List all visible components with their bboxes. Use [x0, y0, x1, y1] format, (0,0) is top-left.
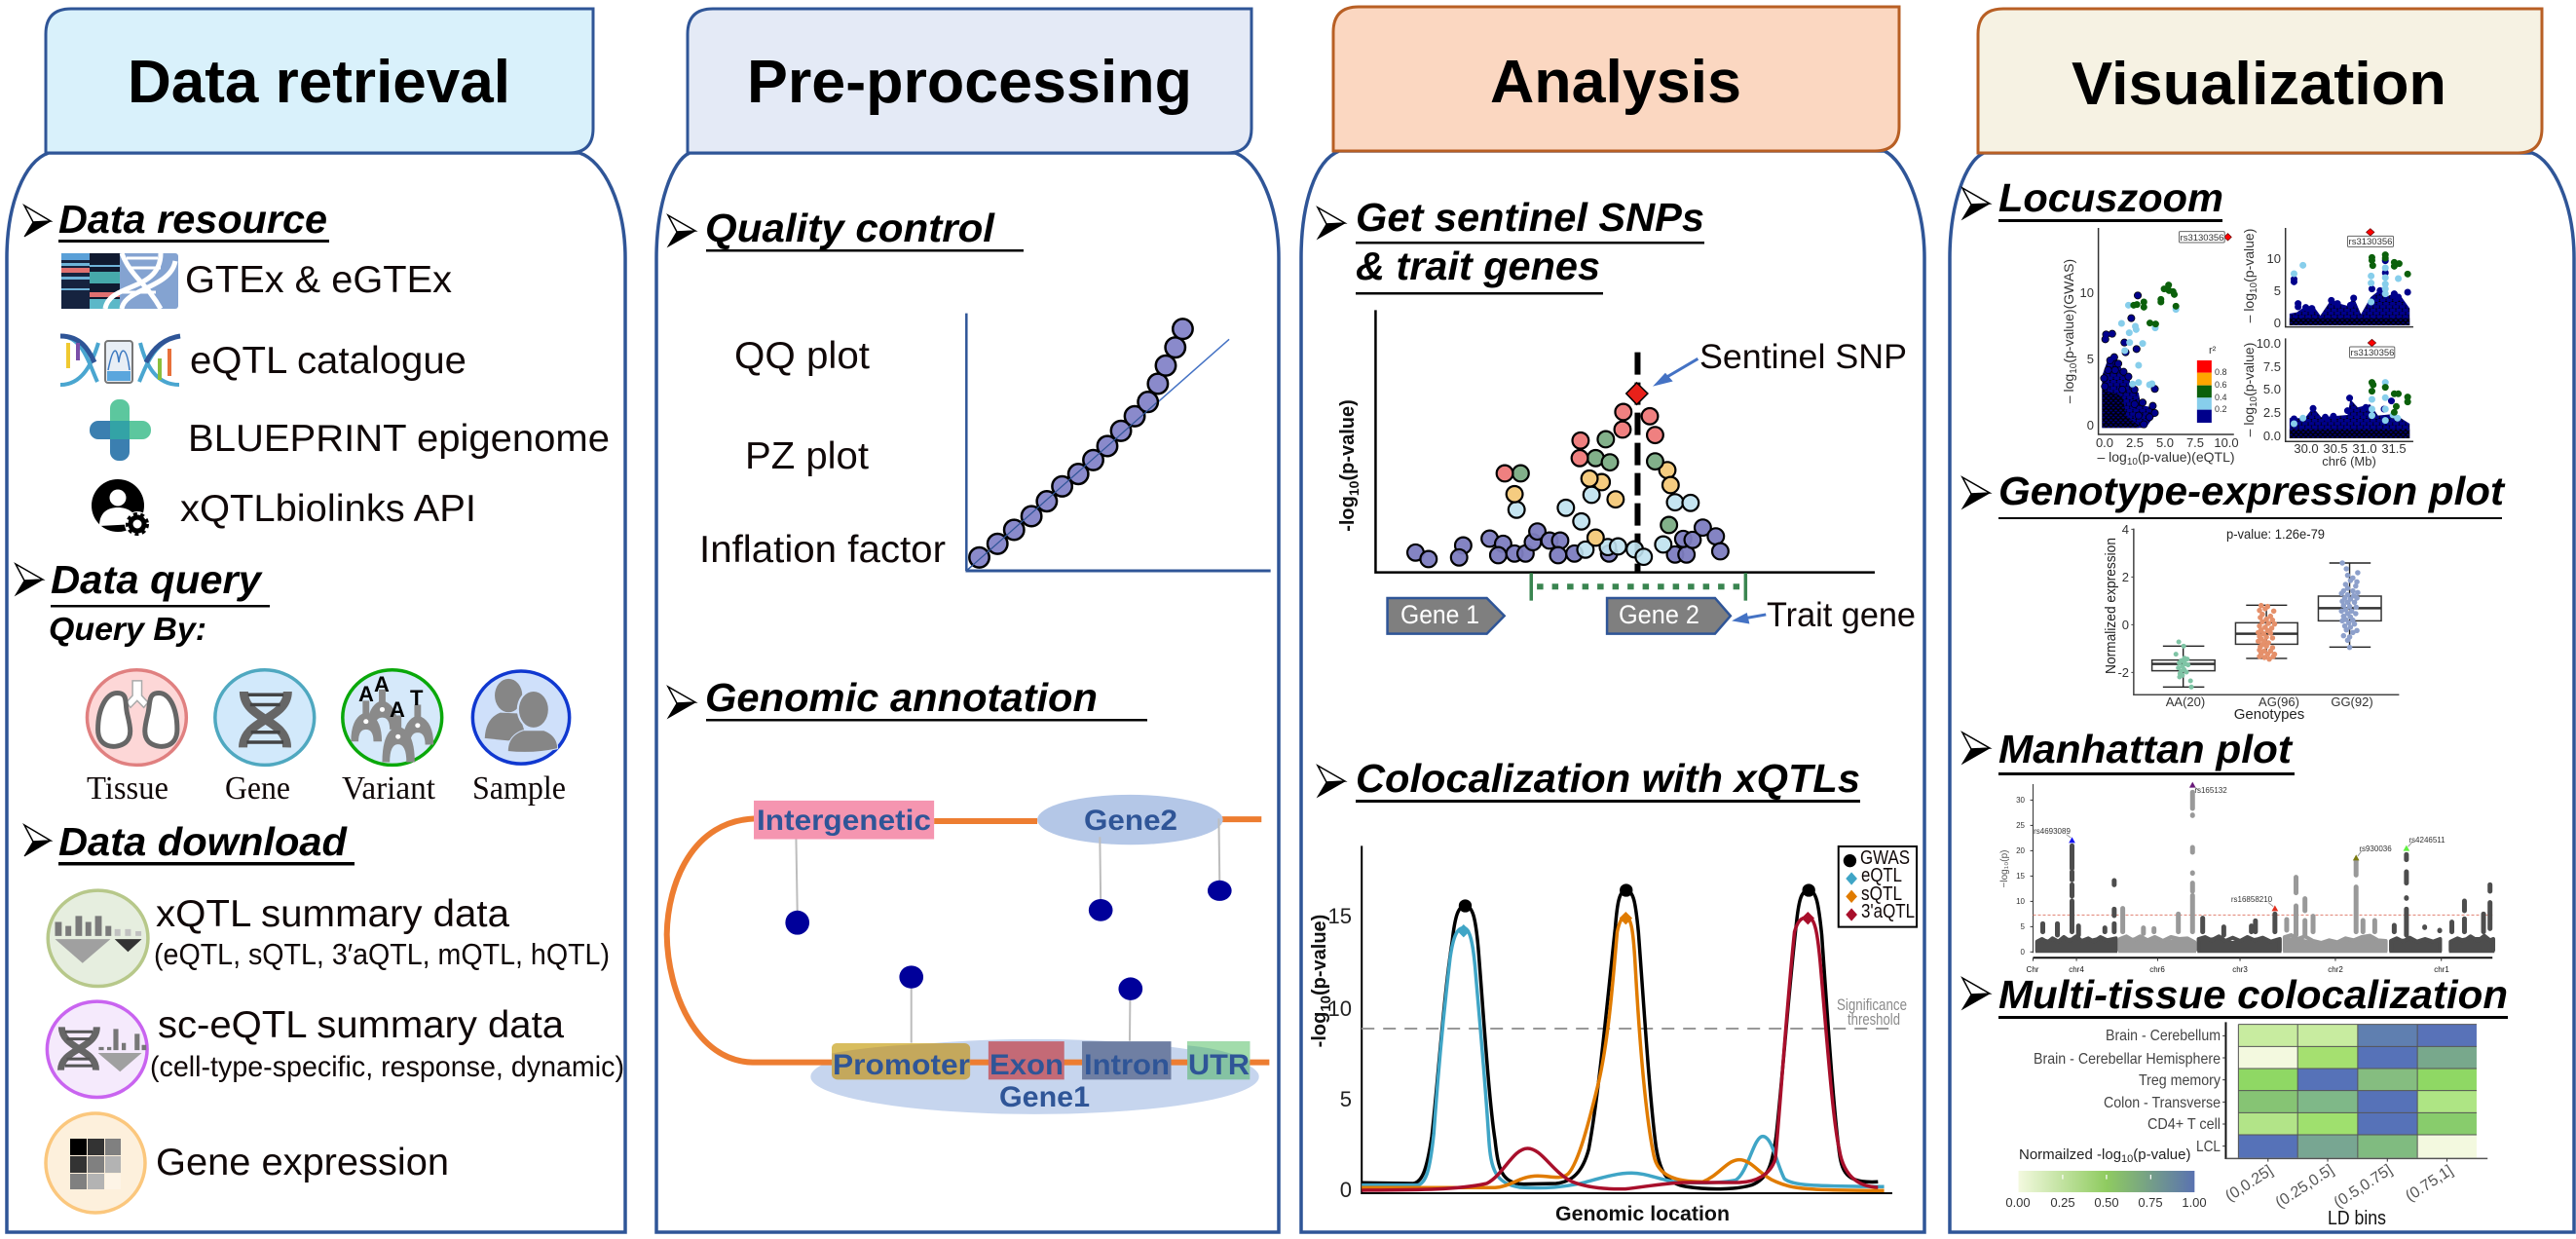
chart: manhattan plot: 25: [2016, 821, 2026, 830]
text: query by: Query By:: [49, 611, 206, 647]
chart: colocalization curves: 10: [1328, 996, 1352, 1021]
chart: manhattan plot: Chr: [2027, 965, 2039, 974]
chart: sentinel SNP scatter: 10: [1346, 480, 1362, 496]
icon: variant: A: [390, 697, 405, 722]
chart: genotype-expression boxplot: AG(96): [2259, 695, 2299, 709]
panel header: pre-processing: [688, 9, 1251, 153]
text: xQTL summary data: xQTL summary data: [156, 893, 509, 935]
panel body outline: [7, 153, 625, 1232]
icon: GTEx: [61, 253, 178, 309]
text: inflation factor: Inflation factor: [699, 529, 946, 571]
chart: locuszoom plots: r²: [2209, 345, 2217, 357]
panel header: data retrieval: Data retrieval: [128, 49, 510, 116]
chart: locuszoom plots: 0.2: [2215, 404, 2227, 414]
chart: multi-tissue heatmap: LD bins: [2328, 1208, 2386, 1229]
chart: sentinel SNP scatter: Gene 1: [1400, 600, 1479, 629]
chart: multi-tissue heatmap: [2005, 1022, 2487, 1229]
chart: locuszoom plots: 5: [2087, 352, 2094, 366]
chart: sentinel SNP scatter: [1337, 310, 1916, 634]
heading: data download: Data download: [58, 819, 348, 864]
chart: multi-tissue heatmap: (p-value): [2133, 1146, 2190, 1163]
chart: locuszoom plots: 5: [2274, 283, 2281, 298]
chart: multi-tissue heatmap: Brain - Cerebellum: [2106, 1028, 2221, 1044]
chart: locuszoom plots: 31.0: [2352, 441, 2377, 456]
diagram: genomic annotation: Intergenetic: [757, 805, 931, 837]
chart: locuszoom plots: 10: [2267, 251, 2281, 266]
chart: multi-tissue heatmap: Brain - Cerebellar Hemisphere: [2034, 1051, 2221, 1068]
heading: quality control: Quality control: [705, 206, 996, 250]
chart: genotype-expression boxplot: -2: [2117, 665, 2129, 680]
chart: locuszoom plots: (p-value)(eQTL): [2138, 449, 2235, 465]
text: gene expression: Gene expression: [156, 1142, 449, 1183]
chart: locuszoom plots: 0: [2087, 418, 2094, 432]
text: tissue: Tissue: [87, 770, 168, 807]
heading: get sentinel SNPs and trait genes: & trait genes: [1356, 244, 1600, 288]
chart: locuszoom plots: 10: [2127, 457, 2138, 468]
chart: locuszoom plots: [2061, 228, 2413, 469]
heading: data query: Data query: [51, 557, 263, 602]
chart: locuszoom plots: 0: [2274, 316, 2281, 330]
chart: locuszoom plots: 0.6: [2215, 380, 2227, 390]
chart: locuszoom plots: 31.5: [2381, 441, 2407, 456]
chart: genotype-expression boxplot: p-value: 1.26e-79: [2226, 526, 2325, 542]
chart: colocalization curves: GWAS: [1860, 847, 1910, 869]
chart: sentinel SNP scatter: Gene 2: [1619, 600, 1699, 629]
chart: manhattan plot: 20: [2016, 846, 2026, 855]
chart: multi-tissue heatmap: CD4+ T cell: [2147, 1116, 2221, 1133]
chart: genotype-expression boxplot: GG(92): [2331, 695, 2373, 709]
chart: sentinel SNP scatter: -log: [1337, 496, 1359, 532]
chart: multi-tissue heatmap: (0,0.25]: [2222, 1162, 2276, 1205]
panel body outline: [656, 153, 1279, 1232]
chart: multi-tissue heatmap: 10: [2121, 1153, 2133, 1165]
icon: eQTL catalogue: [60, 336, 180, 385]
diagram: genomic annotation: Intron: [1084, 1049, 1170, 1081]
chart: manhattan plot: [1999, 782, 2494, 974]
diagram: genomic annotation: Exon: [989, 1049, 1064, 1081]
chart: locuszoom plots: 10.0: [2214, 435, 2239, 450]
heading: colocalization with xQTLs: Colocalization with xQTLs: [1356, 756, 1860, 801]
icon: gene DNA: [215, 670, 315, 765]
icon: tissue lungs: [87, 670, 186, 765]
icon: gene expression heatmap: [46, 1113, 145, 1213]
chart: colocalization curves: Genomic location: [1555, 1203, 1730, 1225]
chart: QQ plot: [965, 314, 1271, 571]
chart: manhattan plot: rs4246511: [2408, 836, 2445, 845]
chart: locuszoom plots: 10: [2069, 362, 2079, 374]
chart: colocalization curves: Significance: [1837, 995, 1907, 1014]
icon: sample people: [472, 671, 570, 764]
chart: locuszoom plots: – log: [2061, 374, 2076, 403]
chart: locuszoom plots: (p-value): [2241, 343, 2257, 396]
chart: colocalization curves: 5: [1340, 1087, 1352, 1111]
chart: manhattan plot: 15: [2016, 872, 2026, 881]
chart: genotype-expression boxplot: Genotypes: [2234, 706, 2304, 723]
text: xQTLbiolinks API: xQTLbiolinks API: [180, 488, 476, 530]
chart: locuszoom plots: 0.0: [2263, 429, 2281, 443]
chart: locuszoom plots: rs3130356: [2181, 233, 2223, 244]
chart: manhattan plot: 5: [2021, 922, 2026, 931]
chart: multi-tissue heatmap: Colon - Transverse: [2104, 1095, 2221, 1111]
chart: colocalization curves: (p-value): [1309, 915, 1330, 995]
chart: manhattan plot: rs165132: [2194, 786, 2227, 795]
text: QQ plot: QQ plot: [734, 335, 870, 377]
chart: colocalization curves: 10: [1318, 995, 1334, 1012]
chart: sentinel SNP scatter: Trait gene: [1767, 596, 1916, 634]
chart: manhattan plot: 0: [2021, 948, 2026, 957]
heading: multi-tissue colocalization: Multi-tissue colocalization: [1998, 972, 2508, 1017]
chart: sentinel SNP scatter: Sentinel SNP: [1699, 338, 1907, 376]
diagram: genomic annotation: Gene1: [999, 1081, 1090, 1113]
chart: colocalization curves: 3'aQTL: [1861, 901, 1915, 922]
chart: locuszoom plots: (p-value): [2241, 229, 2257, 282]
chart: genotype-expression boxplot: 4: [2122, 522, 2129, 537]
chart: manhattan plot: −log₁₀(p): [1999, 850, 2010, 887]
chart: locuszoom plots: 10: [2080, 285, 2094, 300]
chart: multi-tissue heatmap: 0.50: [2094, 1195, 2119, 1210]
chart: manhattan plot: rs16858210: [2231, 895, 2273, 904]
chart: colocalization curves: eQTL: [1861, 865, 1902, 886]
chart: locuszoom plots: 10: [2249, 395, 2259, 407]
chart: locuszoom plots: 10.0: [2257, 336, 2281, 351]
chart: manhattan plot: rs4693089: [2034, 827, 2071, 836]
panel body outline: [1950, 153, 2574, 1232]
chart: locuszoom plots: 0.0: [2096, 435, 2113, 450]
chart: genotype-expression boxplot: 0: [2122, 618, 2129, 632]
text: BLUEPRINT epigenome: BLUEPRINT epigenome: [188, 418, 610, 460]
icon: xQTL summary: [48, 890, 148, 987]
chart: locuszoom plots: 2.5: [2126, 435, 2144, 450]
panel header: data retrieval: [46, 9, 593, 153]
text: GTEx and eGTEx: GTEx & eGTEx: [185, 259, 453, 301]
chart: locuszoom plots: – log: [2241, 407, 2257, 436]
chart: multi-tissue heatmap: (0.25,0.5]: [2273, 1162, 2337, 1212]
panel header: visualization: Visualization: [2072, 51, 2446, 118]
icon: BLUEPRINT: [90, 399, 151, 461]
chart: multi-tissue heatmap: 1.00: [2182, 1195, 2207, 1210]
panel header: pre-processing: Pre-processing: [747, 49, 1192, 116]
chart: locuszoom plots: 30.0: [2294, 441, 2319, 456]
text: sample: Sample: [472, 770, 566, 807]
chart: sentinel SNP scatter: (p-value): [1337, 399, 1359, 481]
chart: multi-tissue heatmap: Normailzed -log: [2019, 1146, 2121, 1163]
icon: API user: [92, 479, 150, 537]
text: sc-eQTL summary data: (cell-type-specific, response, dynamic): [150, 1051, 624, 1083]
icon: variant: A: [374, 672, 390, 696]
heading: genotype-expression plot: Genotype-expression plot: [1998, 469, 2506, 513]
text: xQTL summary data: [154, 893, 610, 971]
chart: colocalization curves: sQTL: [1861, 883, 1902, 905]
chart: multi-tissue heatmap: (0.5,0.75]: [2332, 1162, 2396, 1212]
chart: manhattan plot: chr2: [2328, 965, 2343, 974]
chart: multi-tissue heatmap: 0.75: [2138, 1195, 2163, 1210]
chart: locuszoom plots: rs3130356: [2351, 348, 2394, 358]
chart: locuszoom plots: – log: [2241, 293, 2257, 322]
text: sc-eQTL summary data: [150, 1004, 624, 1083]
heading: locuszoom: Locuszoom: [1998, 175, 2223, 220]
chart: multi-tissue heatmap: LCL: [2196, 1139, 2221, 1155]
text: variant: Variant: [342, 770, 436, 807]
chart: locuszoom plots: 10: [2249, 282, 2259, 293]
gene 1 ellipse: [810, 1039, 1259, 1114]
chart: locuszoom plots: 7.5: [2186, 435, 2204, 450]
chart: locuszoom plots: 0.4: [2215, 393, 2227, 402]
icon: variant: T: [410, 686, 424, 710]
diagram: genomic annotation: Promoter: [833, 1049, 970, 1081]
chart: multi-tissue heatmap: 0.00: [2005, 1195, 2031, 1210]
chart: locuszoom plots: – log: [2097, 449, 2127, 465]
chart: colocalization curves: 15: [1328, 904, 1352, 928]
panel header: analysis: [1333, 7, 1899, 151]
chart: locuszoom plots: 0.8: [2215, 367, 2227, 377]
chart: manhattan plot: chr3: [2232, 965, 2248, 974]
chart: multi-tissue heatmap: 0.25: [2050, 1195, 2075, 1210]
panel: visualization: [1950, 9, 2574, 1232]
chart: manhattan plot: chr6: [2149, 965, 2165, 974]
icon: variant: [343, 670, 442, 765]
heading: genomic annotation: Genomic annotation: [705, 675, 1098, 720]
panel: data retrieval: [7, 9, 625, 1232]
text: PZ plot: PZ plot: [745, 435, 869, 477]
chart: colocalization curves: [1309, 845, 1917, 1225]
chart: multi-tissue heatmap: Treg memory: [2139, 1072, 2221, 1089]
text: sc-eQTL summary data: sc-eQTL summary data: [158, 1004, 564, 1046]
icon: sc-eQTL summary: [47, 1001, 147, 1098]
chart: genotype-expression boxplot: Normalized expression: [2103, 538, 2119, 674]
chart: locuszoom plots: 5.0: [2263, 382, 2281, 396]
heading: manhattan plot: Manhattan plot: [1998, 727, 2294, 771]
panel: analysis: [1301, 7, 1924, 1232]
diagram: genomic annotation: UTR: [1188, 1049, 1250, 1081]
chart: locuszoom plots: chr6 (Mb): [2322, 454, 2376, 469]
chart: locuszoom plots: 30.5: [2323, 441, 2348, 456]
chart: genotype-expression boxplot: 2: [2122, 570, 2129, 584]
text: eQTL catalogue: eQTL catalogue: [190, 340, 467, 382]
panel: pre-processing: [656, 9, 1279, 1232]
chart: manhattan plot: chr4: [2069, 965, 2084, 974]
chart: manhattan plot: rs930036: [2359, 845, 2392, 853]
chart: locuszoom plots: 5.0: [2156, 435, 2174, 450]
heading: data resource: Data resource: [58, 197, 327, 242]
chart: manhattan plot: chr1: [2434, 965, 2449, 974]
chart: multi-tissue heatmap: (0.75,1]: [2403, 1162, 2456, 1205]
chart: manhattan plot: 30: [2016, 796, 2026, 805]
text: xQTL summary data: (eQTL, sQTL, 3′aQTL, mQTL, hQTL): [154, 937, 610, 971]
chart: locuszoom plots: (p-value)(GWAS): [2061, 259, 2076, 363]
diagram: genomic annotation: [667, 795, 1269, 1114]
chart: colocalization curves: 0: [1340, 1178, 1352, 1202]
diagram: genomic annotation: Gene2: [1084, 805, 1177, 837]
icon: variant: A: [358, 682, 374, 706]
chart: manhattan plot: 10: [2016, 897, 2026, 906]
chart: locuszoom plots: 7.5: [2263, 359, 2281, 374]
panel header: analysis: Analysis: [1490, 49, 1741, 116]
chart: genotype-expression boxplot: [2103, 522, 2399, 723]
chart: locuszoom plots: rs3130356: [2349, 237, 2392, 247]
panel body outline: [1301, 151, 1924, 1232]
chart: locuszoom plots: 2.5: [2263, 405, 2281, 420]
chart: genotype-expression boxplot: AA(20): [2166, 695, 2205, 709]
chart: colocalization curves: -log: [1309, 1012, 1330, 1047]
heading: get sentinel SNPs and trait genes: Get sentinel SNPs: [1356, 195, 1704, 240]
text: gene: Gene: [225, 770, 290, 807]
panel header: visualization: [1978, 9, 2542, 153]
chart: colocalization curves: threshold: [1848, 1010, 1900, 1029]
heading: get sentinel SNPs and trait genes: [1318, 195, 1704, 294]
